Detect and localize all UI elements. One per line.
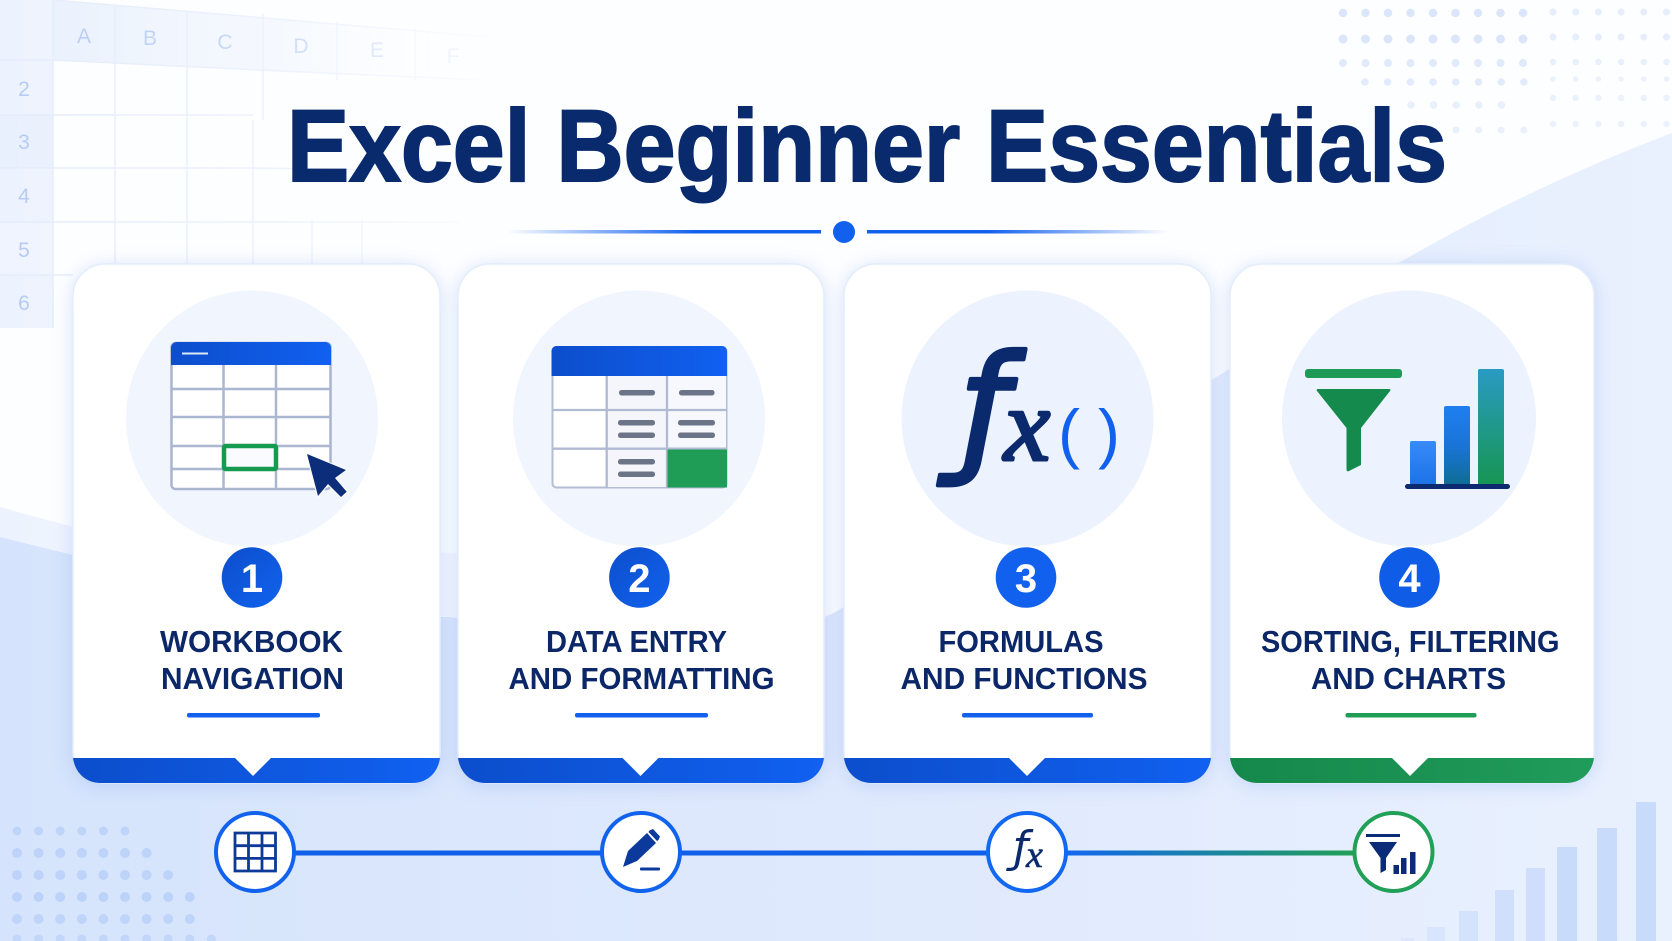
- background spreadsheet grid: F: [447, 45, 459, 68]
- background spreadsheet grid: 6: [18, 292, 30, 315]
- card body: [73, 264, 440, 783]
- step number 1: 1: [241, 557, 263, 601]
- panel: workbook navigation: [73, 264, 440, 783]
- panel: sorting, filtering and charts: [1230, 264, 1594, 783]
- underline: [962, 713, 1093, 718]
- step number 2: 2: [628, 557, 651, 601]
- icon: funnel: [1305, 369, 1402, 471]
- timeline icon: fx: [988, 813, 1066, 891]
- step number 4: 4: [1398, 557, 1421, 601]
- underline: [1346, 713, 1476, 718]
- timeline icon: fx: x: [1025, 834, 1043, 876]
- panel: data entry and formatting: [458, 264, 824, 783]
- step number 1: [222, 547, 282, 608]
- dot pattern: bottom left: [17, 831, 212, 939]
- heading: AND FORMATTING: [508, 661, 774, 696]
- step number 3: 3: [1015, 557, 1037, 601]
- background spreadsheet grid: 3: [18, 131, 30, 154]
- icon: fx function symbol: [937, 326, 1120, 490]
- heading: DATA ENTRY: [546, 624, 727, 659]
- icon: bar chart: [1405, 369, 1510, 489]
- icon circle: [513, 290, 765, 546]
- background spreadsheet grid: C: [217, 31, 233, 54]
- heading: AND CHARTS: [1311, 661, 1506, 696]
- background spreadsheet grid: D: [293, 35, 309, 58]
- background spreadsheet grid: 5: [18, 239, 30, 262]
- heading: [508, 624, 774, 696]
- icon: fx function symbol: ƒ: [937, 326, 1026, 490]
- step number 4: [1379, 547, 1440, 608]
- underline: [575, 713, 708, 718]
- card body: [458, 264, 824, 783]
- heading: NAVIGATION: [161, 661, 344, 696]
- timeline connector: [295, 850, 1355, 856]
- heading: [160, 624, 344, 696]
- heading: FORMULAS: [938, 624, 1104, 659]
- timeline icon: fx: ƒ: [1006, 822, 1034, 873]
- heading: SORTING, FILTERING: [1261, 624, 1560, 659]
- icon: fx function symbol: (: [1058, 396, 1080, 470]
- card body: [844, 264, 1211, 783]
- timeline icon: pencil: [602, 813, 680, 891]
- icon: spreadsheet with cursor: [171, 342, 347, 497]
- background spreadsheet grid: E: [370, 39, 384, 62]
- background spreadsheet grid: 4: [18, 185, 30, 208]
- background spreadsheet grid: 2: [18, 78, 30, 101]
- icon: formatted table: [552, 346, 727, 488]
- background bars: bottom right: [1401, 802, 1656, 941]
- heading: AND FUNCTIONS: [900, 661, 1148, 696]
- title: Excel Beginner Essentials: [287, 89, 1447, 203]
- heading: [900, 624, 1148, 696]
- title divider: [507, 221, 1169, 243]
- timeline icon: grid: [216, 813, 294, 891]
- panel: formulas and functions: [844, 264, 1211, 783]
- icon: fx function symbol: x: [1002, 368, 1050, 483]
- underline: [187, 713, 320, 718]
- background spreadsheet grid: [0, 0, 500, 328]
- step number 3: [996, 547, 1056, 608]
- timeline icon: filter and chart: [1354, 813, 1432, 891]
- icon: fx function symbol: ): [1098, 396, 1120, 470]
- card body: [1230, 264, 1594, 783]
- step number 2: [609, 547, 670, 608]
- dot pattern: top right: [1343, 12, 1670, 130]
- heading: [1261, 624, 1560, 696]
- icon circle: [902, 290, 1154, 546]
- icon circle: [126, 290, 378, 546]
- heading: WORKBOOK: [160, 624, 344, 659]
- background spreadsheet grid: B: [143, 27, 157, 50]
- icon circle: [1282, 290, 1536, 546]
- background spreadsheet grid: A: [77, 25, 91, 48]
